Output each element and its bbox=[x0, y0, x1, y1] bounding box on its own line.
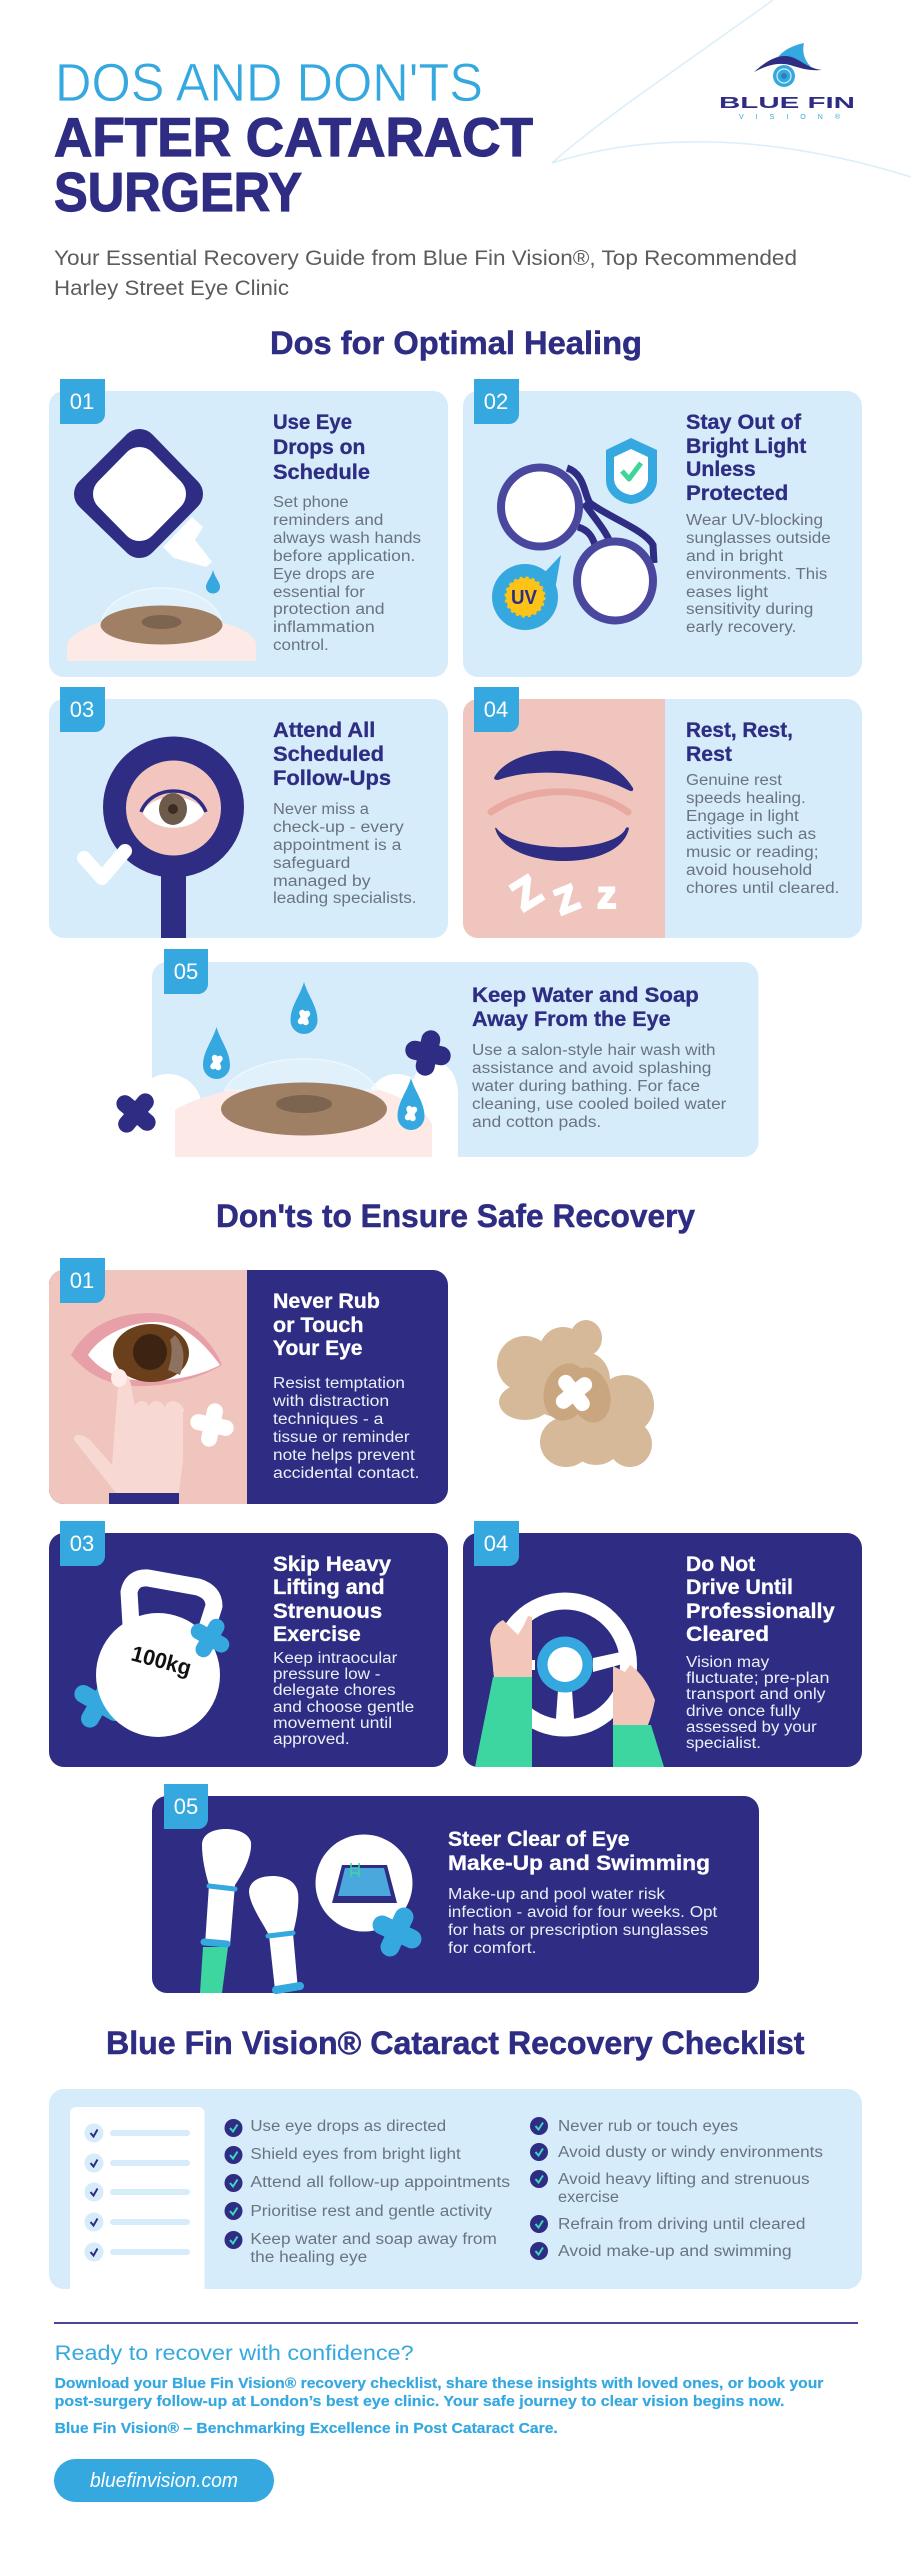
logo: Blue Fin Vision bbox=[719, 43, 855, 121]
panel: do 01 eye drops bbox=[49, 379, 448, 677]
card text: assistance and avoid splashing bbox=[472, 1060, 711, 1077]
list right: Refrain from driving until cleared bbox=[558, 2216, 806, 2233]
card text: Eye drops are bbox=[273, 566, 375, 583]
subtitle: Your Essential Recovery Guide from Blue Fin Vision®, Top Recommended bbox=[54, 247, 797, 270]
card title: Steer Clear of Eye bbox=[448, 1828, 630, 1851]
card title bbox=[273, 1290, 380, 1360]
panel: do 01 eye drops: 01 bbox=[70, 389, 94, 414]
list right: Never rub or touch eyes bbox=[558, 2118, 738, 2135]
card title: Unless bbox=[686, 458, 756, 481]
card text bbox=[686, 1654, 830, 1752]
card text: tissue or reminder bbox=[273, 1429, 410, 1446]
card text bbox=[273, 801, 416, 907]
card text bbox=[273, 494, 421, 654]
card text: inflammation bbox=[273, 619, 375, 636]
icon: steering wheel and hands bbox=[475, 1601, 664, 1767]
card title bbox=[686, 411, 806, 505]
card text: essential for bbox=[273, 584, 365, 601]
card title bbox=[472, 984, 699, 1031]
card text: Never miss a bbox=[273, 801, 369, 818]
call to action text: Blue Fin Vision® – Benchmarking Excellence in Post Cataract Care. bbox=[55, 2420, 558, 2437]
icon: kettlebell: 100kg bbox=[129, 1641, 194, 1681]
panel: do 03 follow-ups: 03 bbox=[70, 697, 94, 722]
card text: and in bright bbox=[686, 548, 784, 565]
card text: for hats or prescription sunglasses bbox=[448, 1922, 709, 1939]
card text: Engage in light bbox=[686, 808, 799, 825]
card title: Use Eye bbox=[273, 411, 352, 434]
card text: drive once fully bbox=[686, 1703, 801, 1720]
card text: Wear UV-blocking bbox=[686, 512, 823, 529]
icon: eye and finger bbox=[71, 1313, 238, 1504]
card title: Rest bbox=[686, 743, 732, 766]
card text: approved. bbox=[273, 1731, 350, 1748]
card title: Follow-Ups bbox=[273, 767, 391, 790]
card text bbox=[273, 1650, 414, 1748]
card text: for comfort. bbox=[448, 1940, 536, 1957]
list left bbox=[250, 2118, 510, 2266]
card text bbox=[686, 512, 831, 636]
subtitle: Harley Street Eye Clinic bbox=[54, 277, 289, 300]
card text: chores until cleared. bbox=[686, 880, 839, 897]
card text: check-up - every bbox=[273, 819, 404, 836]
check bullets left bbox=[224, 2119, 242, 2249]
card text: Genuine rest bbox=[686, 772, 783, 789]
card title: Stay Out of bbox=[686, 411, 801, 434]
title: SURGERY bbox=[54, 161, 302, 223]
icon: checklist document bbox=[70, 2107, 204, 2289]
logo: Blue Fin Vision: BLUE FIN bbox=[719, 95, 855, 112]
icon: UV bubble bbox=[492, 555, 561, 630]
panel: don't 05 make-up and swimming bbox=[152, 1784, 759, 1993]
panel: do 05 water and soap: 05 bbox=[174, 959, 198, 984]
card text: infection - avoid for four weeks. Opt bbox=[448, 1904, 718, 1921]
panel: do 03 follow-ups bbox=[49, 687, 448, 938]
card title: Exercise bbox=[273, 1623, 361, 1646]
card text: specialist. bbox=[686, 1735, 761, 1752]
icon: eye with water drops bbox=[104, 982, 458, 1160]
website button bbox=[54, 2459, 274, 2502]
icon: closed eye with zzz: Z bbox=[549, 876, 584, 922]
card text: Set phone bbox=[273, 494, 348, 511]
card text: movement until bbox=[273, 1715, 392, 1732]
list right: Avoid dusty or windy environments bbox=[558, 2144, 823, 2161]
subtitle bbox=[54, 247, 797, 300]
card text: cleaning, use cooled boiled water bbox=[472, 1096, 726, 1113]
card title: Make-Up and Swimming bbox=[448, 1852, 710, 1875]
check bullets right bbox=[530, 2117, 548, 2260]
card text: Vision may bbox=[686, 1654, 769, 1671]
icon: magnifier with eye bbox=[84, 736, 244, 938]
card title bbox=[448, 1828, 710, 1875]
card text: with distraction bbox=[272, 1393, 389, 1410]
list right: exercise bbox=[558, 2189, 619, 2206]
icon: shield bbox=[606, 438, 657, 504]
card text: early recovery. bbox=[686, 619, 796, 636]
card title: Scheduled bbox=[273, 743, 384, 766]
card text: sunglasses outside bbox=[686, 530, 831, 547]
card title: Away From the Eye bbox=[472, 1008, 671, 1031]
list left: Attend all follow-up appointments bbox=[250, 2174, 510, 2191]
list left: the healing eye bbox=[250, 2249, 367, 2266]
card title: Strenuous bbox=[273, 1600, 382, 1623]
card title: Rest, Rest, bbox=[686, 719, 793, 742]
card title: Lifting and bbox=[273, 1576, 385, 1599]
card title: Schedule bbox=[273, 461, 370, 484]
icon: tan dust cloud bbox=[497, 1320, 654, 1467]
card title: Never Rub bbox=[273, 1290, 380, 1313]
icon: closed eye with zzz: z bbox=[597, 874, 616, 917]
card text: Resist temptation bbox=[273, 1375, 405, 1392]
panel: do 02 bright light bbox=[463, 379, 862, 677]
card title: or Touch bbox=[273, 1314, 364, 1337]
card title: Drops on bbox=[273, 436, 365, 459]
card text bbox=[272, 1375, 419, 1482]
panel: don't 04 driving bbox=[463, 1521, 862, 1767]
card text: environments. This bbox=[686, 566, 827, 583]
icon: closed eye with zzz: Z bbox=[503, 866, 550, 920]
panel: don't 01 rub bbox=[49, 1258, 448, 1504]
heading: don'ts: Don'ts to Ensure Safe Recovery bbox=[216, 1198, 695, 1234]
card text: always wash hands bbox=[273, 530, 421, 547]
card text: and cotton pads. bbox=[472, 1114, 601, 1131]
list right bbox=[558, 2118, 823, 2260]
panel: do 05 water and soap bbox=[104, 949, 758, 1160]
panel: do 04 rest: 04 bbox=[484, 697, 508, 722]
card title: Your Eye bbox=[273, 1337, 362, 1360]
card text: safeguard bbox=[273, 855, 350, 872]
card text bbox=[448, 1886, 718, 1957]
icon: sunglasses bbox=[501, 468, 654, 620]
heading: checklist: Blue Fin Vision® Cataract Recovery Checklist bbox=[106, 2025, 805, 2061]
card title: Attend All bbox=[273, 719, 375, 742]
icon: kettlebell bbox=[62, 1578, 239, 1740]
card text: techniques - a bbox=[273, 1411, 384, 1428]
card title bbox=[273, 1553, 391, 1646]
card text: speeds healing. bbox=[686, 790, 806, 807]
card text: Use a salon-style hair wash with bbox=[472, 1042, 716, 1059]
icon: swimming pool with cross bbox=[316, 1834, 432, 1967]
title: AFTER CATARACT bbox=[54, 106, 533, 168]
icon: eye drop bottle bbox=[92, 447, 220, 594]
card text: appointment is a bbox=[273, 837, 402, 854]
card text bbox=[471, 1042, 726, 1131]
card title: Protected bbox=[686, 482, 788, 505]
panel: don't 03 lifting: 03 bbox=[70, 1531, 94, 1556]
icon: closed eye with zzz bbox=[491, 751, 633, 922]
card text: before application. bbox=[273, 548, 415, 565]
card title: Skip Heavy bbox=[273, 1553, 391, 1576]
card text: reminders and bbox=[273, 512, 383, 529]
title bbox=[54, 53, 533, 223]
card title: Professionally bbox=[686, 1600, 835, 1623]
title: DOS AND DON'TS bbox=[55, 53, 483, 113]
card title bbox=[273, 411, 370, 484]
card text: pressure low - bbox=[273, 1666, 380, 1683]
card text: fluctuate; pre-plan bbox=[686, 1670, 830, 1687]
call to action text bbox=[55, 2375, 824, 2437]
card text: eases light bbox=[686, 584, 769, 601]
panel: don't 05 make-up and swimming: 05 bbox=[174, 1794, 198, 1819]
card text: music or reading; bbox=[686, 844, 818, 861]
card text: leading specialists. bbox=[273, 890, 416, 907]
call to action heading: Ready to recover with confidence? bbox=[55, 2342, 414, 2365]
card text: delegate chores bbox=[273, 1682, 396, 1699]
website button: bluefinvision.com bbox=[90, 2470, 238, 2492]
card text: managed by bbox=[273, 873, 371, 890]
card text: note helps prevent bbox=[273, 1447, 416, 1464]
icon: UV bubble: UV bbox=[511, 587, 538, 609]
card text: Make-up and pool water risk bbox=[448, 1886, 665, 1903]
card text: and choose gentle bbox=[273, 1699, 414, 1716]
list left: Prioritise rest and gentle activity bbox=[250, 2203, 492, 2220]
card text: avoid household bbox=[686, 862, 812, 879]
card text: accidental contact. bbox=[273, 1465, 419, 1482]
card text: control. bbox=[273, 637, 329, 654]
panel: do 02 bright light: 02 bbox=[484, 389, 508, 414]
card title bbox=[686, 1553, 835, 1646]
list right: Avoid make-up and swimming bbox=[558, 2243, 792, 2260]
card text bbox=[686, 772, 839, 897]
panel: don't 03 lifting bbox=[49, 1521, 448, 1767]
card title: Do Not bbox=[686, 1553, 755, 1576]
card text: activities such as bbox=[686, 826, 816, 843]
call to action text: post-surgery follow-up at London’s best eye clinic. Your safe journey to clear vision begins now. bbox=[55, 2393, 784, 2410]
panel: checklist bbox=[49, 2089, 862, 2289]
card text: Keep intraocular bbox=[273, 1650, 397, 1667]
list right: Avoid heavy lifting and strenuous bbox=[558, 2171, 810, 2188]
logo: Blue Fin Vision: VISION® bbox=[739, 113, 841, 121]
list left: Keep water and soap away from bbox=[250, 2231, 497, 2248]
call to action text: Download your Blue Fin Vision® recovery checklist, share these insights with loved ones, or book your bbox=[55, 2375, 824, 2392]
card title: Bright Light bbox=[686, 435, 806, 458]
card text: transport and only bbox=[686, 1686, 826, 1703]
icon: eye with lens bbox=[67, 588, 256, 661]
list left: Shield eyes from bright light bbox=[250, 2146, 461, 2163]
panel: don't 04 driving: 04 bbox=[484, 1531, 508, 1556]
heading: dos: Dos for Optimal Healing bbox=[270, 325, 642, 361]
card title: Drive Until bbox=[686, 1576, 793, 1599]
card text: sensitivity during bbox=[686, 601, 813, 618]
card title bbox=[686, 719, 793, 766]
card title: Keep Water and Soap bbox=[472, 984, 699, 1007]
panel: do 04 rest bbox=[463, 687, 862, 938]
card title bbox=[273, 719, 391, 790]
list left: Use eye drops as directed bbox=[250, 2118, 446, 2135]
icon: make-up brushes bbox=[200, 1829, 300, 1993]
card text: protection and bbox=[273, 601, 385, 618]
panel: don't 01 rub: 01 bbox=[70, 1268, 94, 1293]
card text: water during bathing. For face bbox=[471, 1078, 700, 1095]
card title: Cleared bbox=[686, 1623, 769, 1646]
card text: assessed by your bbox=[686, 1719, 817, 1736]
